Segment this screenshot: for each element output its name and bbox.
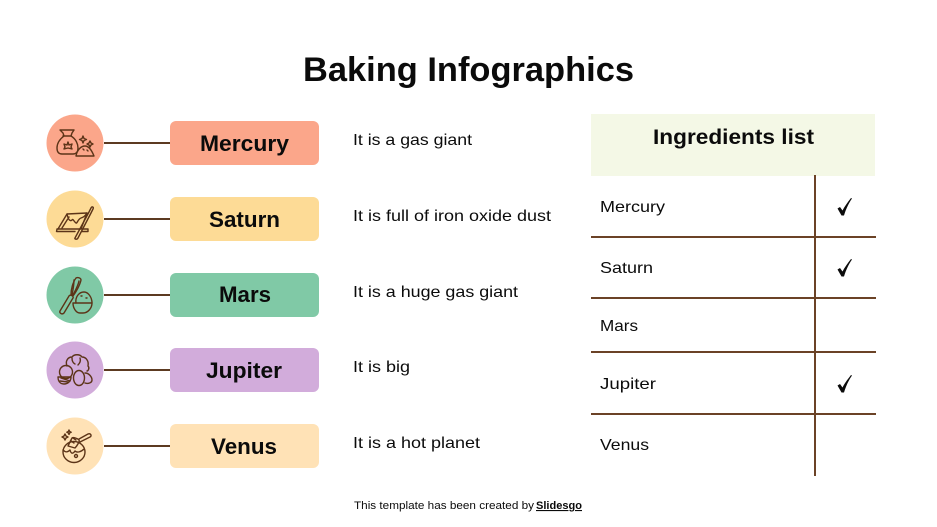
table row: Mercury: Mercury bbox=[600, 199, 665, 216]
row: Saturn bbox=[46, 190, 552, 248]
row: Jupiter bbox=[46, 342, 410, 398]
connector: Mercury bbox=[104, 142, 170, 144]
footer credit: This template has been created by bbox=[354, 500, 535, 512]
table row: Mercury bbox=[600, 198, 852, 216]
pill: Jupiter bbox=[170, 348, 319, 392]
pill: Mars bbox=[170, 273, 319, 317]
connector: Venus bbox=[104, 445, 170, 447]
icon: whisk and bowl bbox=[46, 266, 104, 324]
pill: Venus bbox=[170, 424, 319, 468]
icon: honey pot bbox=[46, 418, 104, 474]
check mark: Jupiter bbox=[838, 375, 852, 392]
connector: Mars bbox=[104, 294, 170, 296]
pill: Saturn bbox=[170, 197, 319, 241]
icon: rolling pin and dough bbox=[46, 190, 104, 248]
pill: Mars: Mars bbox=[219, 282, 271, 307]
pill: Jupiter: Jupiter bbox=[206, 358, 282, 383]
pill: Mercury bbox=[170, 121, 319, 165]
table header: Ingredients list bbox=[653, 125, 814, 149]
connector: Saturn bbox=[104, 218, 170, 220]
description: Mars: It is a huge gas giant bbox=[353, 284, 519, 301]
description: Saturn: It is full of iron oxide dust bbox=[353, 208, 552, 225]
description: Venus: It is a hot planet bbox=[353, 435, 481, 452]
pill: Saturn: Saturn bbox=[209, 207, 280, 232]
table row: Saturn: Saturn bbox=[600, 260, 653, 277]
table row: Saturn bbox=[600, 259, 852, 277]
table row: Mars: Mars bbox=[600, 318, 638, 335]
description: Mercury: It is a gas giant bbox=[353, 132, 473, 149]
table row: Venus: Venus bbox=[600, 437, 649, 454]
table row: Jupiter bbox=[600, 375, 852, 393]
title: Baking Infographics bbox=[303, 51, 634, 89]
pill: Mercury: Mercury bbox=[200, 131, 290, 156]
check mark: Mercury bbox=[838, 198, 852, 216]
table row: Jupiter: Jupiter bbox=[600, 376, 657, 393]
icon: flour sack bbox=[46, 114, 104, 172]
description: Jupiter: It is big bbox=[353, 359, 410, 376]
row: Mercury bbox=[46, 114, 473, 172]
connector: Jupiter bbox=[104, 369, 170, 371]
check mark: Saturn bbox=[838, 259, 852, 276]
row: Venus bbox=[46, 418, 481, 474]
row: Mars bbox=[46, 266, 519, 324]
pill: Venus: Venus bbox=[211, 434, 277, 459]
footer credit: Slidesgo bbox=[536, 500, 582, 512]
table header bbox=[591, 114, 875, 176]
table: ingredients list bbox=[591, 114, 876, 476]
icon: eggs bbox=[46, 342, 104, 398]
